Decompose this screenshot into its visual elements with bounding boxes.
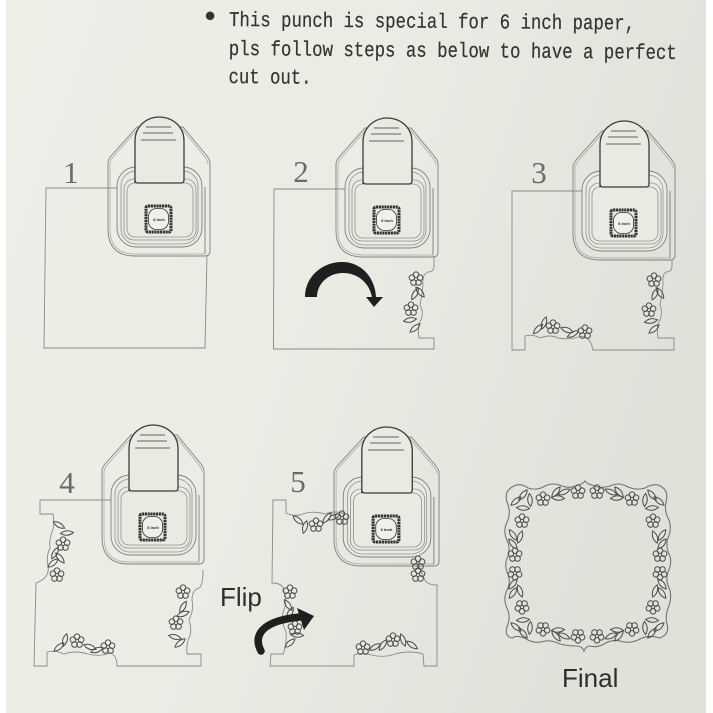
right border ornament [403,272,426,334]
paper sheet 4 with three cut edges [34,500,203,666]
punch tool 3 [573,121,675,260]
step 4 [34,425,204,666]
step 5 [220,427,439,666]
frame outline [505,481,671,651]
step number 2: 2 [293,154,309,189]
right border ornament [642,273,666,335]
punch tool 3: 6 inch [618,221,630,226]
paper sheet 3 with two cut edges [512,191,674,350]
flip arrow [258,608,314,651]
step number 3: 3 [531,155,547,190]
instruction line 1: This punch is special for 6 inch paper, [229,10,635,37]
step 2 [274,118,438,349]
instruction line 3: cut out. [228,67,312,91]
rotate arrow [305,262,383,307]
instruction text block [205,10,677,94]
paper sheet 5 with four cut edges [270,500,437,666]
bottom border ornament [356,633,419,654]
punch tool 4: 6 inch [147,525,159,530]
punch tool 2 [336,118,438,257]
punch tool 1: 6 inch [153,217,165,222]
frame ornaments [507,485,668,643]
punch tool 5 [334,427,439,566]
paper sheet 2 with right edge cut [274,189,434,349]
punch tool 2: 6 inch [381,218,393,223]
punch tool 1 [108,117,210,256]
step number 4: 4 [59,465,75,500]
left border ornament [282,585,304,649]
bottom border ornament [532,316,592,339]
paper sheet 1 [44,188,207,348]
step 1 [44,117,210,348]
step 3 [512,121,675,350]
punch tool 4 [102,425,204,564]
step number 5: 5 [290,464,306,499]
right border ornament [168,585,190,649]
bottom border ornament [53,633,115,654]
punch tool 5: 6 inch [381,527,393,532]
bullet [206,12,214,20]
step number 1: 1 [63,155,79,190]
final label: Final [562,663,618,693]
top border ornament [292,511,349,534]
final cut frame [505,481,671,693]
left border ornament [47,520,74,581]
right border ornament [411,556,425,581]
flip label: Flip [220,582,262,612]
